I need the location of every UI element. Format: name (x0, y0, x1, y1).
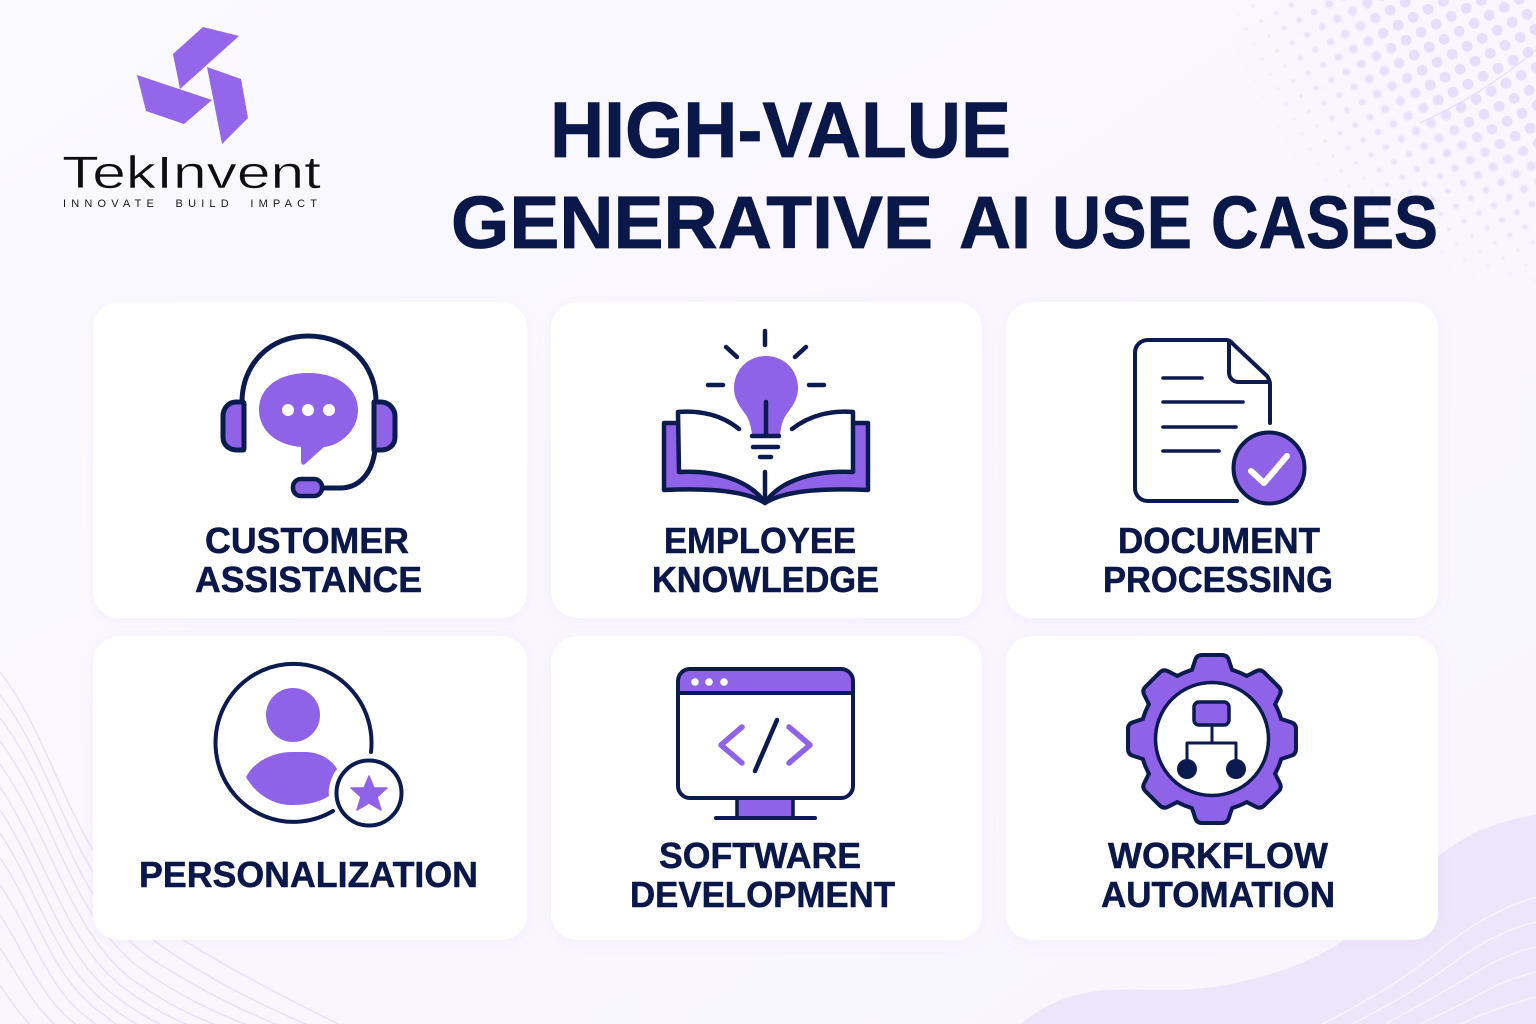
panel: workflow automation (1006, 636, 1438, 940)
title line 2: CASES (1211, 181, 1438, 264)
icon: code window on monitor (678, 669, 853, 818)
panel: employee knowledge (551, 302, 982, 618)
label (630, 835, 895, 915)
label: KNOWLEDGE (652, 559, 879, 600)
label: CUSTOMER (205, 520, 409, 561)
label (652, 520, 879, 600)
icon: gear with flowchart (1130, 657, 1294, 821)
icon: book with light bulb (664, 331, 868, 503)
label (1101, 835, 1335, 915)
label: PROCESSING (1103, 559, 1333, 600)
title line 2: GENERATIVE (451, 181, 933, 264)
panel: software development (551, 636, 982, 940)
label: AUTOMATION (1101, 874, 1335, 915)
title line 2: USE (1052, 181, 1192, 264)
label: PERSONALIZATION (139, 854, 478, 895)
title line 2: AI (959, 181, 1031, 264)
title (451, 85, 1438, 264)
panel: personalization (93, 636, 527, 940)
label: EMPLOYEE (664, 520, 856, 561)
label: DEVELOPMENT (630, 874, 895, 915)
logo: TekInvent (62, 27, 322, 210)
label: DOCUMENT (1118, 520, 1320, 561)
background: halftone dots (1252, 0, 1536, 264)
icon: user with star (216, 664, 402, 826)
label (1103, 520, 1333, 600)
background: wave lines bottom left (0, 672, 350, 1024)
logo tagline: INNOVATE BUILD IMPACT (63, 198, 317, 210)
panel: document processing (1006, 302, 1438, 618)
logo mark (137, 27, 248, 144)
label: ASSISTANCE (195, 559, 422, 600)
icon: document with check (1135, 340, 1304, 504)
icon: headset with chat bubble (223, 336, 395, 496)
title line 2 (451, 181, 1438, 264)
panel: customer assistance (93, 302, 527, 618)
title line 1: HIGH-VALUE (550, 85, 1011, 174)
background: lavender wave bottom right (1020, 815, 1536, 1024)
label: SOFTWARE (659, 835, 861, 876)
label (195, 520, 422, 600)
label: WORKFLOW (1108, 835, 1328, 876)
logo wordmark: TekInvent (62, 147, 322, 198)
